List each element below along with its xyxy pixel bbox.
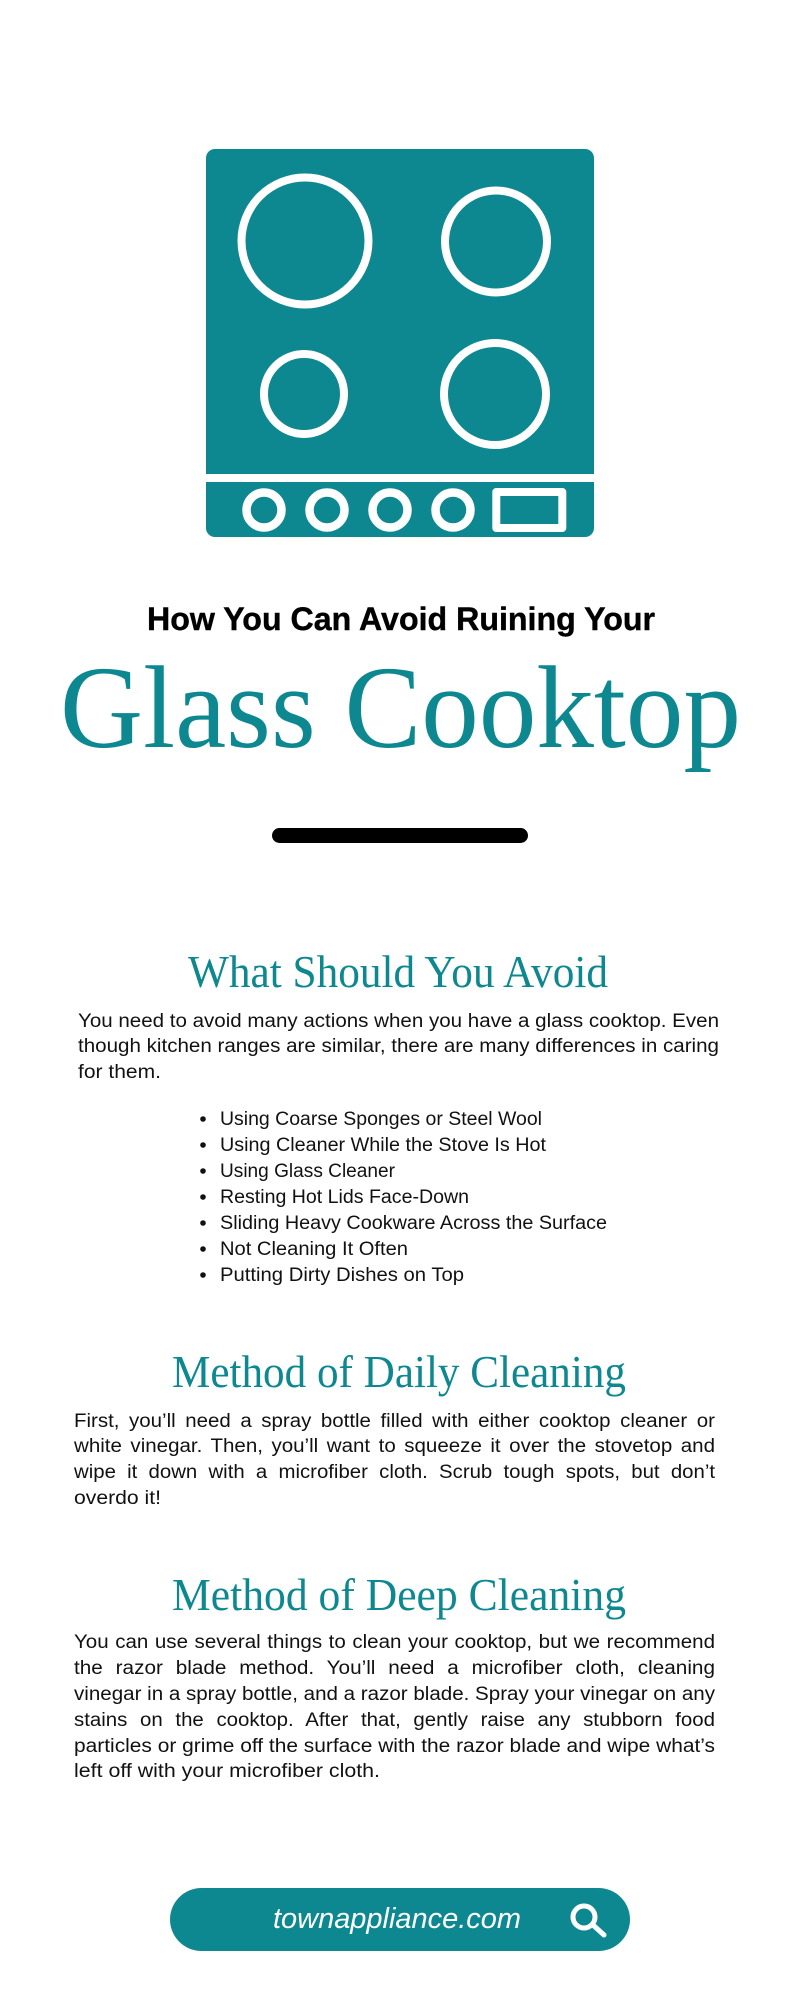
section: method of deep cleaning	[74, 1569, 716, 1782]
paragraph: daily cleaning steps: wipe it down with a microfiber cloth. Scrub tough spots, but don’t	[73, 1462, 716, 1483]
paragraph: deep cleaning steps: You can use several things to clean your cooktop, but we recommend	[74, 1632, 715, 1653]
bullet list: things to avoid: Resting Hot Lids Face-Down	[220, 1187, 469, 1208]
paragraph: deep cleaning steps: stains on the cooktop. After that, gently raise any stubborn food	[74, 1710, 715, 1731]
paragraph: daily cleaning steps: overdo it!	[74, 1488, 161, 1509]
section: what should you avoid	[78, 946, 719, 1286]
heading: method of deep cleaning: Method of Deep Cleaning	[172, 1569, 626, 1620]
bullet list: things to avoid: Putting Dirty Dishes on Top	[220, 1265, 464, 1286]
icon: magnifying glass	[573, 1906, 604, 1935]
bullet list: things to avoid	[200, 1109, 607, 1286]
paragraph: deep cleaning steps: vinegar in a spray bottle, and a razor blade. Spray your vinegar on any	[74, 1684, 716, 1705]
bullet list: things to avoid: Using Cleaner While the Stove Is Hot	[220, 1135, 547, 1156]
paragraph: deep cleaning steps: particles or grime off the surface with the razor blade and wipe what’s	[74, 1736, 715, 1757]
title line: how you can avoid ruining your: How You Can Avoid Ruining Your	[147, 601, 655, 637]
intro paragraph: for them.	[78, 1062, 161, 1083]
bullet list: things to avoid: Using Glass Cleaner	[220, 1161, 396, 1182]
intro paragraph: though kitchen ranges are similar, there are many differences in caring	[78, 1036, 719, 1057]
heading: what should you avoid: What Should You Avoid	[188, 946, 608, 997]
paragraph: deep cleaning steps	[74, 1632, 716, 1782]
paragraph: daily cleaning steps: First, you’ll need a spray bottle filled with either cooktop cleaner or	[74, 1411, 716, 1432]
paragraph: daily cleaning steps: white vinegar. Then, you’ll want to squeeze it over the stovetop and	[73, 1436, 715, 1457]
heading: method of daily cleaning: Method of Daily Cleaning	[172, 1346, 626, 1397]
title line: glass cooktop: Glass Cooktop	[60, 642, 741, 773]
bullet list: things to avoid: Sliding Heavy Cookware Across the Surface	[220, 1213, 607, 1234]
icon: glass cooktop	[206, 149, 594, 537]
footer search pill	[170, 1888, 630, 1951]
intro paragraph	[78, 1011, 719, 1083]
paragraph: daily cleaning steps	[73, 1411, 716, 1509]
intro paragraph: You need to avoid many actions when you have a glass cooktop. Even	[78, 1011, 719, 1032]
website url: townappliance.com	[273, 1903, 521, 1935]
title divider bar	[272, 828, 528, 843]
bullet list: things to avoid: Not Cleaning It Often	[220, 1239, 408, 1260]
paragraph: deep cleaning steps: the razor blade method. You’ll need a microfiber cloth, cleaning	[74, 1658, 715, 1679]
bullet list: things to avoid: Using Coarse Sponges or Steel Wool	[220, 1109, 542, 1130]
paragraph: deep cleaning steps: left off with your microfiber cloth.	[74, 1761, 380, 1782]
section: method of daily cleaning	[73, 1346, 716, 1509]
